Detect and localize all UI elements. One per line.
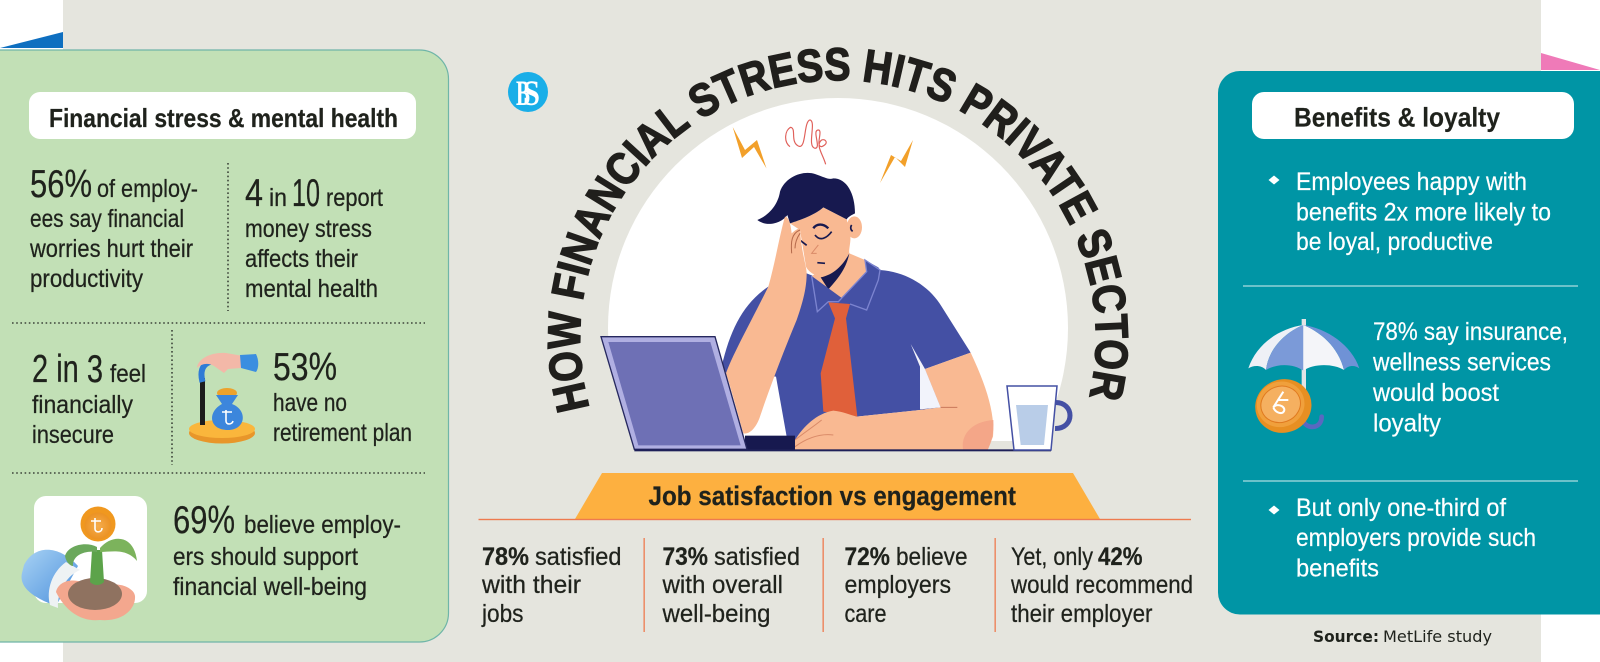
stat: 69 percent: financial well-being [173, 573, 367, 601]
stat column: 78 percent: satisfied [535, 543, 622, 571]
logo: S [523, 73, 540, 113]
hair [757, 173, 855, 224]
stat: 53 percent: 53% [273, 346, 337, 389]
text: 78 percent insurance: would boost [1372, 379, 1499, 407]
text: 78 percent insurance [1372, 318, 1568, 438]
text: 78 percent insurance: 78% say insurance, [1373, 318, 1568, 346]
stat column: 78 percent: jobs [481, 600, 524, 628]
panel heading [1252, 92, 1574, 139]
neck [812, 253, 867, 302]
stat: 4 in 10: 4 [245, 172, 263, 215]
icon: red scribble [786, 120, 826, 164]
raised arm and hand [726, 217, 807, 434]
bullet: one-third of employers [1268, 494, 1536, 582]
stat column: 78 percent: with their [481, 571, 581, 599]
stat: 4 in 10: report [326, 184, 383, 212]
stat column: 42 percent: Yet, only [1011, 543, 1093, 571]
stat: 2 in 3: feel [110, 360, 146, 388]
forearm and hand [795, 353, 993, 451]
desk line [634, 449, 1051, 451]
source: Source: [1313, 627, 1379, 646]
stat: 69 percent: believe employ- [244, 511, 401, 539]
logo: B [516, 73, 530, 113]
head [790, 207, 850, 277]
stat column: 72 percent: employers [844, 571, 951, 599]
stat column: 72 percent: 72% [844, 543, 890, 571]
stat: 56 percent [29, 163, 198, 293]
face details [801, 225, 853, 263]
tie [821, 302, 857, 417]
white circle behind illustration [608, 98, 1068, 441]
neck shadow [821, 253, 849, 289]
stat column: 42 percent [1010, 543, 1193, 628]
icon: left lightning [733, 127, 766, 168]
panel heading: Benefits & loyalty [1294, 102, 1500, 132]
panel heading: Financial stress & mental health [49, 103, 398, 133]
stat column: 73 percent: with overall [662, 571, 783, 599]
stat column: 78 percent: 78% [482, 543, 529, 571]
bullet: one-third of employers: benefits [1296, 554, 1379, 582]
keyboard [745, 436, 795, 451]
source: MetLife study [1383, 627, 1492, 646]
icon: umbrella and coin [1248, 319, 1359, 441]
stat: 2 in 3: 2 in 3 [32, 348, 103, 391]
stat: 56 percent: 56% [30, 163, 92, 206]
stat: 56 percent: worries hurt their [29, 235, 193, 263]
shirt [722, 260, 971, 451]
stat column: 72 percent: believe [896, 543, 968, 571]
stat: 4 in 10: mental health [245, 275, 378, 303]
stat: 53 percent [273, 346, 412, 447]
bullet: one-third of employers: But only one-third of [1296, 494, 1506, 522]
stat: 4 in 10 [245, 172, 383, 303]
panel: benefits and loyalty [1218, 71, 1600, 614]
laptop [601, 337, 747, 449]
stat: 53 percent: retirement plan [273, 419, 412, 447]
source [1313, 627, 1492, 646]
stat: 56 percent: ees say financial [30, 205, 184, 233]
stat: 4 in 10: affects their [245, 245, 358, 273]
stat: 2 in 3: insecure [32, 421, 114, 449]
panel: financial stress and mental health [0, 50, 448, 642]
stat: 69 percent: 69% [173, 499, 235, 542]
pink corner tab [1541, 53, 1600, 70]
stat column: 73 percent: satisfied [714, 543, 800, 571]
icon: plant growing coin on hand [22, 496, 147, 620]
stat: 53 percent: have no [273, 389, 347, 417]
banner: job satisfaction vs engagement: Job satisfaction vs engagement [648, 481, 1016, 511]
text: 78 percent insurance: wellness services [1372, 348, 1551, 376]
panel heading [29, 92, 416, 139]
stat: 4 in 10: money stress [245, 215, 372, 243]
stat column: 72 percent: care [844, 600, 886, 628]
banner: job satisfaction vs engagement [575, 473, 1100, 519]
bullet: benefits loyalty: be loyal, productive [1296, 228, 1493, 256]
stat: 56 percent: of employ- [97, 175, 198, 203]
icon: retirement cane and money bag [189, 353, 258, 444]
stat column: 73 percent: well-being [662, 600, 770, 628]
icon: cup of water [1007, 386, 1070, 450]
bullet: benefits loyalty [1268, 168, 1551, 256]
bullet: one-third of employers: employers provide such [1296, 524, 1536, 552]
stat column: 78 percent [481, 543, 622, 628]
stat: 2 in 3: financially [32, 391, 133, 419]
stat column: 73 percent [662, 543, 800, 628]
stat: 2 in 3 [32, 348, 146, 449]
stat column: 42 percent: would recommend [1010, 571, 1193, 599]
illustration: stressed employee at laptop [601, 173, 1051, 451]
text: 78 percent insurance: loyalty [1373, 410, 1441, 438]
icon: right lightning [880, 140, 913, 183]
stat column: 72 percent [844, 543, 968, 628]
stat column: 73 percent: 73% [662, 543, 708, 571]
stat column: 42 percent: 42% [1098, 543, 1142, 571]
stat: 4 in 10: 10 [292, 172, 320, 215]
logo [508, 72, 548, 113]
bullet: benefits loyalty: benefits 2x more likely to [1296, 198, 1551, 226]
stat: 56 percent: productivity [30, 265, 143, 293]
bullet: benefits loyalty: Employees happy with [1296, 168, 1527, 196]
collar [812, 260, 880, 312]
stat: 69 percent [173, 499, 401, 601]
title: HOW FINANCIAL STRESS HITS PRIVATE SECTOR [547, 47, 1129, 413]
stat: 69 percent: ers should support [173, 543, 358, 571]
blue corner tab [0, 32, 63, 48]
stat column: 42 percent: their employer [1011, 600, 1152, 628]
stat: 4 in 10: in [269, 184, 287, 212]
